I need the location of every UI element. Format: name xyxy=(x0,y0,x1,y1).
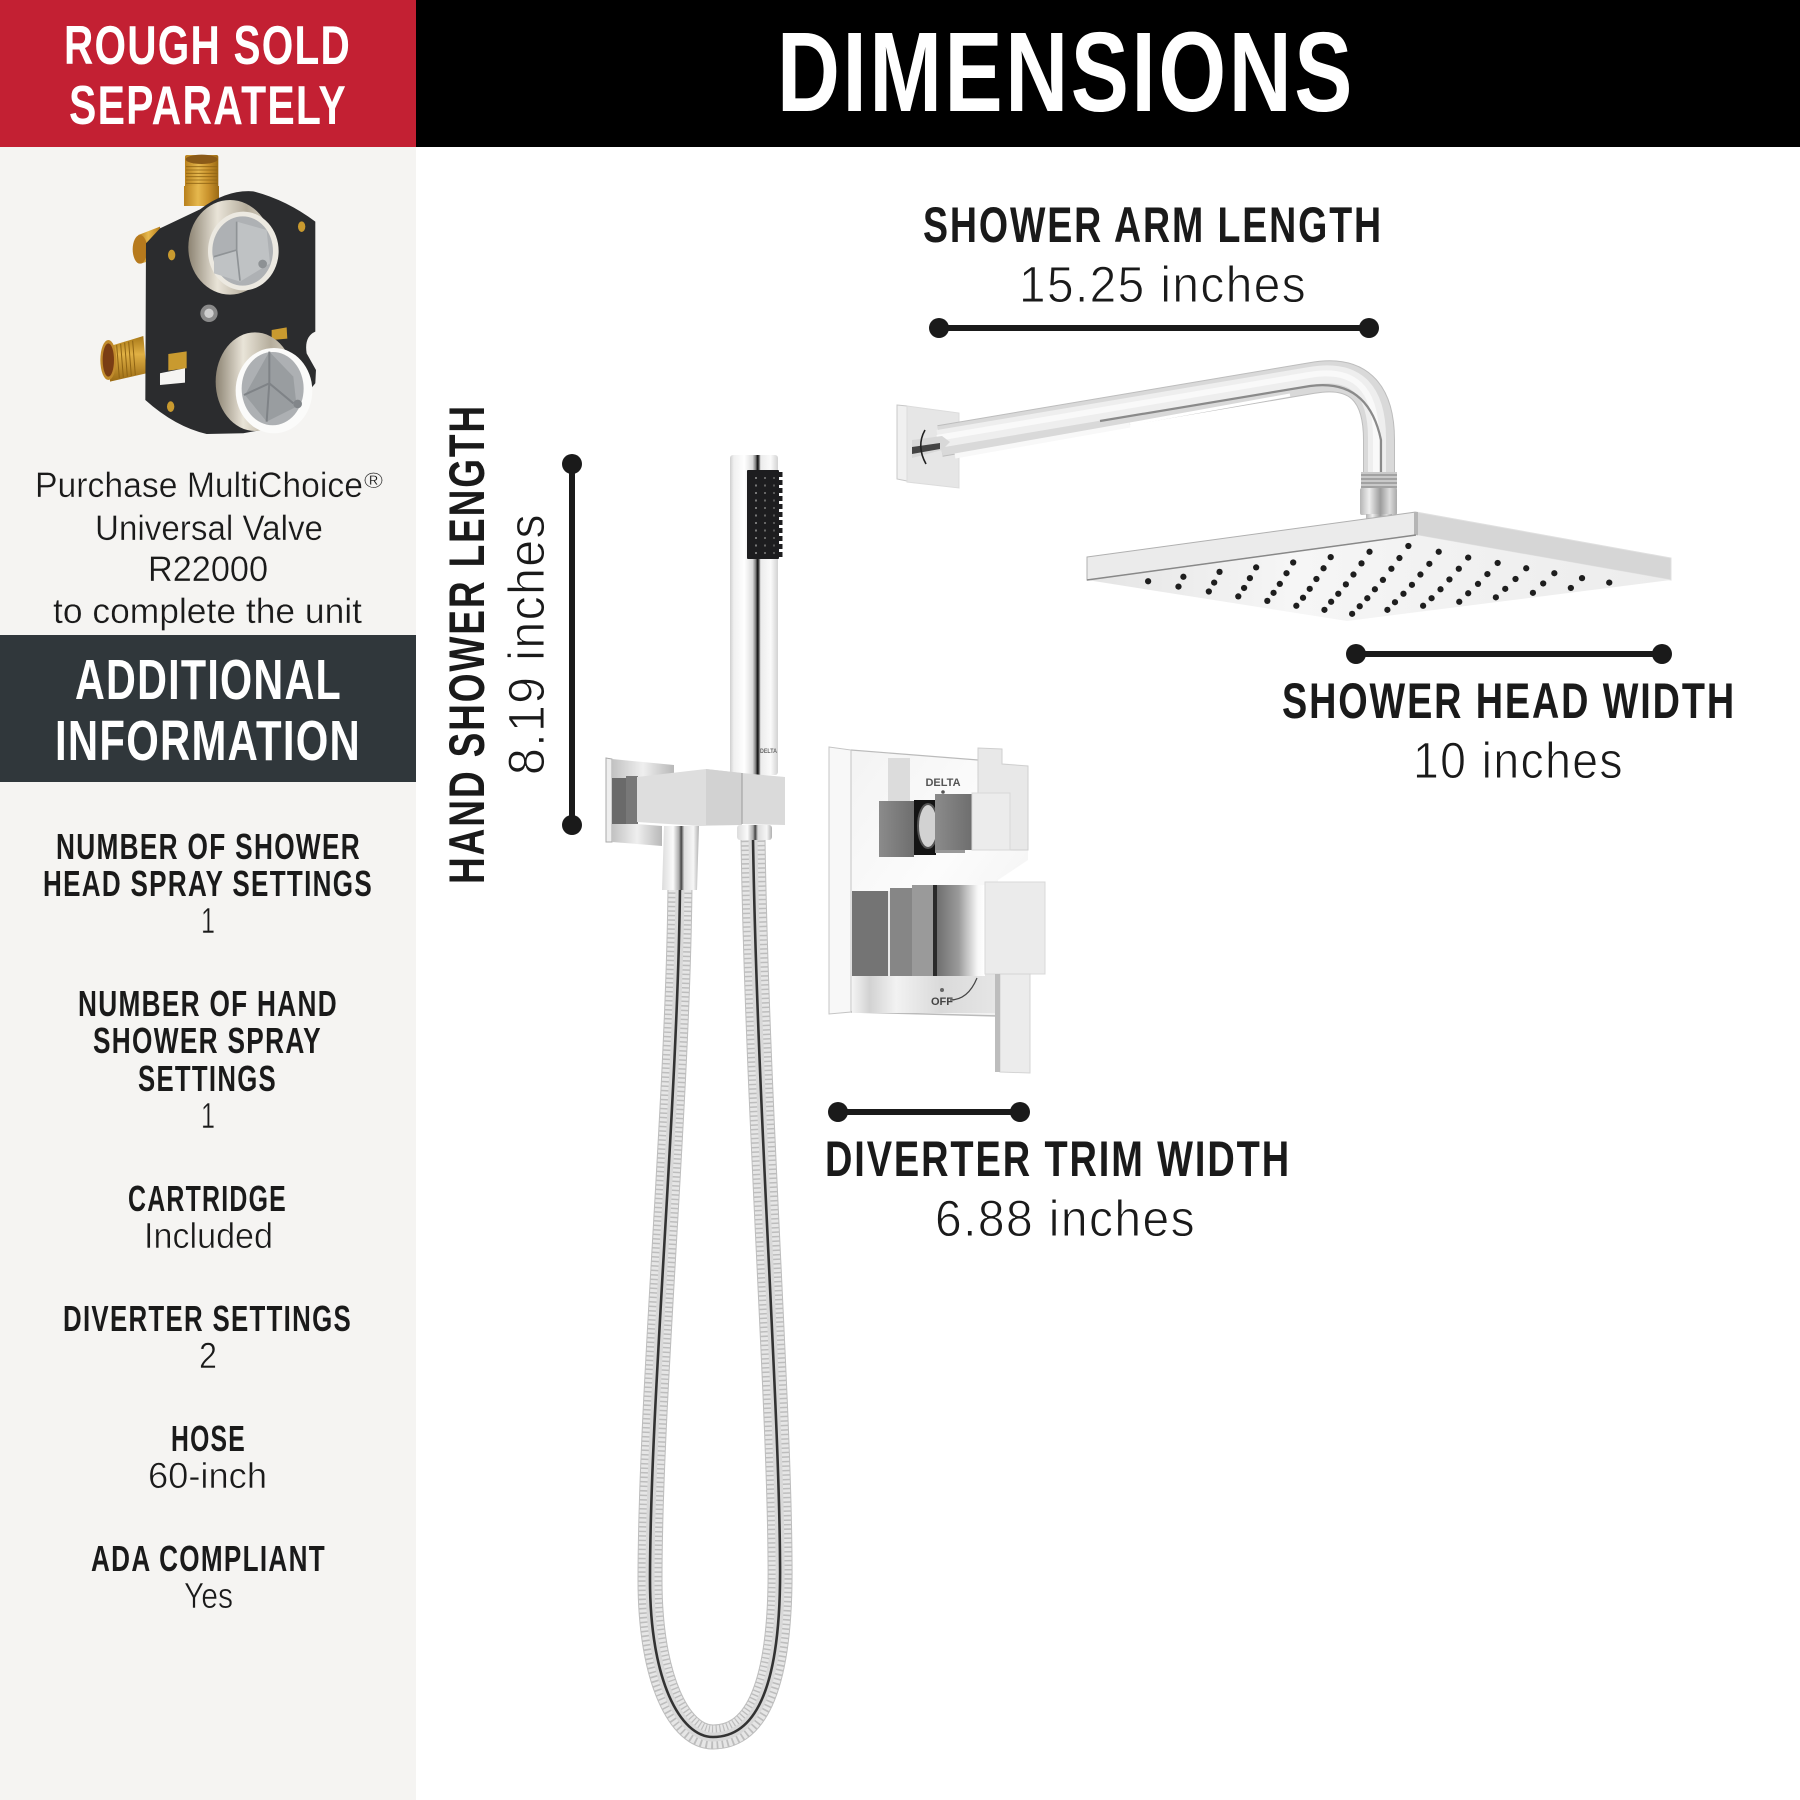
spec: hose xyxy=(148,1418,267,1496)
text: purchase valve note xyxy=(35,466,383,631)
spec: diverter settings: 2 xyxy=(199,1335,217,1376)
dimension: diverter trim width: DIVERTER TRIM WIDTH xyxy=(825,1131,1291,1187)
dimension: shower arm length: SHOWER ARM LENGTH xyxy=(923,197,1383,253)
spec: cartridge: CARTRIDGE xyxy=(128,1178,287,1219)
text: purchase valve note: R22000 xyxy=(148,550,268,589)
dimension: shower arm length xyxy=(923,197,1383,338)
spec: ada compliant: ADA COMPLIANT xyxy=(91,1538,326,1579)
spec: hose: 60-inch xyxy=(148,1455,267,1496)
upper handle xyxy=(879,748,1028,857)
hand shower spray pad xyxy=(747,470,780,559)
spec: cartridge: Included xyxy=(144,1215,273,1256)
spec: cartridge xyxy=(128,1178,287,1256)
spec: diverter settings: DIVERTER SETTINGS xyxy=(63,1298,352,1339)
dimension: diverter trim width xyxy=(825,1102,1291,1247)
text: purchase valve note: to complete the unit xyxy=(53,592,362,631)
spec: hand shower spray settings xyxy=(78,983,338,1136)
text: purchase valve note: ® xyxy=(364,468,383,493)
spec: shower head spray settings: HEAD SPRAY SETTINGS xyxy=(43,863,373,904)
header: rough sold separately: ROUGH SOLD xyxy=(64,14,351,76)
illustration: hand shower and bracket: DELTA xyxy=(760,749,778,755)
spec: shower head spray settings: NUMBER OF SHOWER xyxy=(56,826,361,867)
header: rough sold separately xyxy=(0,0,416,147)
spec: shower head spray settings: 1 xyxy=(201,900,215,941)
lower handle xyxy=(852,882,1045,1073)
header: additional information: INFORMATION xyxy=(55,709,361,773)
header: rough sold separately: SEPARATELY xyxy=(69,74,347,136)
header: dimensions title: DIMENSIONS xyxy=(777,9,1355,135)
spec: ada compliant: Yes xyxy=(184,1575,233,1616)
illustration: shower arm xyxy=(897,373,1397,521)
spec: hand shower spray settings: NUMBER OF HAND xyxy=(78,983,338,1024)
dimension: hand shower length xyxy=(439,404,582,884)
spec: shower head spray settings xyxy=(43,826,373,941)
illustration: diverter trim xyxy=(829,747,1045,1073)
dimension: shower head width: 10 inches xyxy=(1413,732,1624,789)
illustration: square shower head xyxy=(1087,512,1671,621)
dimension: shower head width xyxy=(1282,644,1736,789)
shower head nozzles xyxy=(1145,543,1612,617)
spec: hose: HOSE xyxy=(171,1418,246,1459)
spec: ada compliant xyxy=(91,1538,326,1616)
spec: diverter settings xyxy=(63,1298,352,1376)
panel: left sidebar xyxy=(0,147,416,1800)
icon: rough-in valve xyxy=(100,155,316,434)
header: additional information: ADDITIONAL xyxy=(75,648,342,712)
dimension: diverter trim width: 6.88 inches xyxy=(935,1190,1196,1247)
text: purchase valve note: Universal Valve xyxy=(95,509,323,548)
illustration: hand shower and bracket xyxy=(606,455,785,890)
illustration: diverter trim: DELTA xyxy=(925,777,961,789)
dimension: hand shower length: HAND SHOWER LENGTH xyxy=(439,404,495,884)
text: purchase valve note: Purchase MultiChoice xyxy=(35,466,363,505)
illustration: flexible hose xyxy=(650,838,780,1737)
header: additional information xyxy=(0,635,416,782)
dimension: shower arm length: 15.25 inches xyxy=(1019,256,1307,313)
dimension: hand shower length: 8.19 inches xyxy=(498,513,555,775)
spec: hand shower spray settings: SETTINGS xyxy=(138,1058,277,1099)
spec: hand shower spray settings: SHOWER SPRAY xyxy=(93,1020,322,1061)
header: dimensions title xyxy=(416,0,1800,147)
illustration: diverter trim: OFF xyxy=(931,996,953,1008)
spec: hand shower spray settings: 1 xyxy=(201,1095,215,1136)
